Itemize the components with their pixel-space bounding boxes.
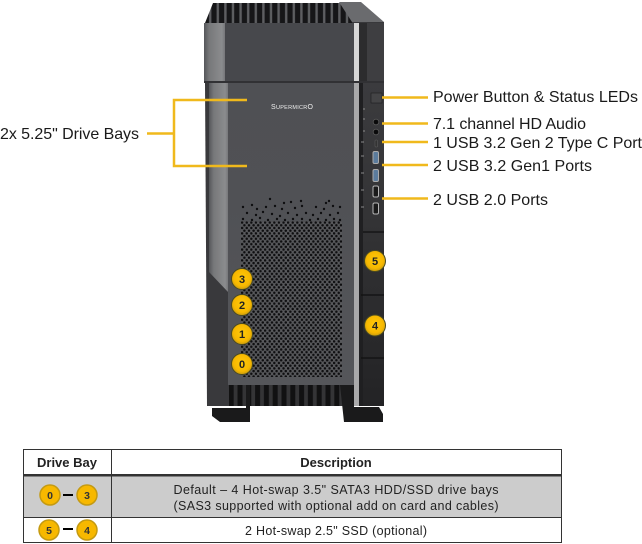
badge 1 xyxy=(232,324,252,344)
bright right edge strip xyxy=(354,83,359,406)
right foot xyxy=(340,385,383,422)
row 2 badges xyxy=(39,520,97,540)
left foot xyxy=(212,385,250,422)
row 1 description: Default – 4 Hot-swap 3.5" SATA3 HDD/SSD drive bays xyxy=(174,483,498,497)
row 1 description xyxy=(174,483,498,513)
badge 1: 1 xyxy=(239,329,245,341)
badge 4: 4 xyxy=(372,320,379,332)
power button xyxy=(371,93,382,103)
side LEDs xyxy=(361,109,365,207)
row 2 badges: 5 xyxy=(46,525,52,537)
bracket xyxy=(147,100,247,166)
brand logo: SUPERMICRO xyxy=(271,104,314,111)
label: usb 3.2: 2 USB 3.2 Gen1 Ports xyxy=(433,158,592,175)
callout: 2x 5.25 drive bays: 2x 5.25" Drive Bays xyxy=(0,126,139,143)
badge 0 xyxy=(232,354,252,374)
row 2 badges: 4 xyxy=(84,525,90,537)
audio jacks xyxy=(373,119,379,125)
callout lines right xyxy=(382,98,428,198)
drive bay table xyxy=(23,450,562,542)
badge 0: 0 xyxy=(239,359,245,371)
front left strip upper xyxy=(204,23,225,83)
badge 2: 2 xyxy=(239,300,245,312)
perforated vent xyxy=(241,198,342,377)
dark right column xyxy=(359,83,384,406)
row 2 description: 2 Hot-swap 2.5" SSD (optional) xyxy=(245,524,427,538)
label: usb c: 1 USB 3.2 Gen 2 Type C Port xyxy=(433,135,642,152)
badge 5 xyxy=(364,250,386,272)
top panel xyxy=(225,23,354,83)
main front panel xyxy=(228,83,354,385)
label: usb 2.0: 2 USB 2.0 Ports xyxy=(433,192,548,209)
badge 3 xyxy=(232,268,252,290)
badge 2 xyxy=(232,294,252,316)
tower chassis xyxy=(204,2,384,422)
shaded row xyxy=(23,476,561,517)
USB 3.2 ports xyxy=(373,152,378,164)
row 1 badges: 0 xyxy=(47,490,53,502)
front I/O ports xyxy=(361,93,382,214)
drive bay badges xyxy=(232,250,386,374)
header: drive bay: Drive Bay xyxy=(37,455,98,470)
USB 2.0 ports xyxy=(373,186,378,197)
label: audio: 7.1 channel HD Audio xyxy=(433,116,586,133)
lower vent band xyxy=(229,385,354,406)
label: power: Power Button & Status LEDs xyxy=(433,89,638,106)
row 1 description: (SAS3 supported with optional add on card and cables) xyxy=(174,499,498,513)
row 1 badges xyxy=(40,485,97,505)
top right slanted cap xyxy=(339,2,384,22)
badge 4 xyxy=(364,315,386,336)
table grid xyxy=(23,450,562,542)
row 1 badges: 3 xyxy=(84,490,90,502)
badge 5: 5 xyxy=(372,256,378,268)
callout: 2x 5.25 drive bays xyxy=(0,100,247,166)
lower left chassis xyxy=(205,83,229,406)
header: description: Description xyxy=(300,455,372,470)
top vent fins xyxy=(205,3,353,23)
badge 3: 3 xyxy=(239,274,245,286)
lower left strip xyxy=(209,83,228,292)
USB C xyxy=(375,140,378,147)
